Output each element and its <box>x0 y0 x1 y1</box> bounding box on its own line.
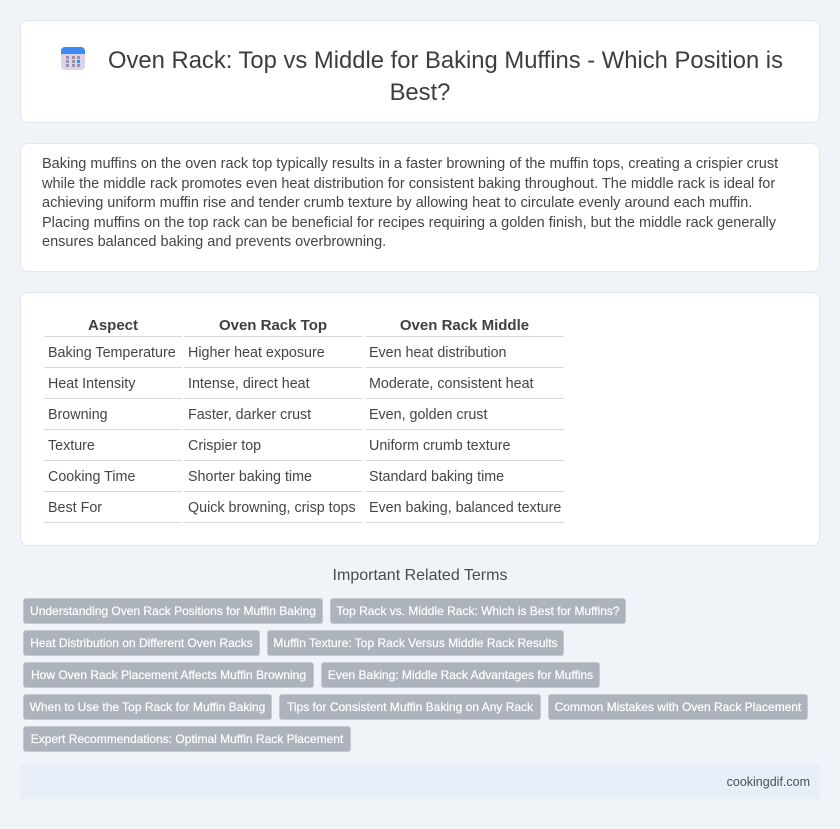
table row: heat intensity: Moderate, consistent heat <box>369 376 534 392</box>
tag <box>279 694 541 720</box>
title <box>108 47 783 106</box>
table row: texture: Crispier top <box>188 438 261 454</box>
table row: baking temperature <box>48 345 506 361</box>
text block: intro: Placing muffins on the top rack can be beneficial for recipes requiring a golden finish, but the middle rack generally <box>42 214 776 230</box>
table row: cooking time <box>48 469 504 485</box>
table row: heat intensity: Heat Intensity <box>48 376 135 392</box>
table row: texture <box>48 438 510 454</box>
tag: Heat Distribution on Different Oven Racks <box>30 636 253 650</box>
table row: best for: Even baking, balanced texture <box>369 500 561 516</box>
table row: heat intensity <box>48 376 534 392</box>
table row: cooking time: Shorter baking time <box>188 469 312 485</box>
table row: best for <box>48 500 561 516</box>
tag: When to Use the Top Rack for Muffin Baking <box>30 700 265 714</box>
table row: baking temperature: Higher heat exposure <box>188 345 325 361</box>
tag: Even Baking: Middle Rack Advantages for Muffins <box>328 668 593 682</box>
tag <box>23 598 323 624</box>
panel: header <box>20 20 820 123</box>
text block: intro: while the middle rack promotes even heat distribution for consistent baking throughout. The middle rack is ideal for <box>42 176 775 192</box>
tag <box>23 630 260 656</box>
text block: intro: ensures balanced baking and prevents overbrowning. <box>42 234 386 250</box>
panel: intro text <box>20 143 820 272</box>
table headers <box>88 317 529 334</box>
table row: cooking time: Cooking Time <box>48 469 135 485</box>
table headers: Aspect <box>88 317 138 334</box>
table row: cooking time: Standard baking time <box>369 469 504 485</box>
tag: Tips for Consistent Muffin Baking on Any Rack <box>287 700 533 714</box>
table headers: Oven Rack Middle <box>400 317 529 334</box>
tags: related terms <box>23 598 808 752</box>
tag: Understanding Oven Rack Positions for Muffin Baking <box>30 604 316 618</box>
footer source: cookingdif.com <box>727 775 810 789</box>
text block: intro: achieving uniform muffin rise and tender crumb texture by allowing heat to circulate evenly around each muffin. <box>42 195 752 211</box>
table headers: Oven Rack Top <box>219 317 327 334</box>
table row: browning: Even, golden crust <box>369 407 487 423</box>
tag <box>23 662 314 688</box>
table row: texture: Texture <box>48 438 95 454</box>
footer <box>20 765 820 799</box>
table row: browning <box>48 407 488 423</box>
tag <box>330 598 626 624</box>
table row: heat intensity: Intense, direct heat <box>188 376 310 392</box>
table row: best for: Best For <box>48 500 102 516</box>
table row: baking temperature: Even heat distribution <box>369 345 506 361</box>
heading: related terms: Important Related Terms <box>333 567 507 584</box>
tag <box>23 726 351 752</box>
tag: How Oven Rack Placement Affects Muffin Browning <box>31 668 306 682</box>
tag <box>23 694 272 720</box>
tag: Muffin Texture: Top Rack Versus Middle Rack Results <box>273 636 558 650</box>
tag: Common Mistakes with Oven Rack Placement <box>555 700 801 714</box>
tag <box>321 662 600 688</box>
table row: browning: Faster, darker crust <box>188 407 311 423</box>
panel: comparison table <box>20 292 820 546</box>
tag <box>548 694 808 720</box>
tag <box>267 630 564 656</box>
title: Oven Rack: Top vs Middle for Baking Muffins - Which Position is <box>108 47 783 74</box>
text block: intro <box>42 156 778 250</box>
table row: best for: Quick browning, crisp tops <box>188 500 356 516</box>
tag: Expert Recommendations: Optimal Muffin Rack Placement <box>31 732 343 746</box>
text block: intro: Baking muffins on the oven rack top typically results in a faster browning of the muffin tops, creating a crispier crust <box>42 156 778 172</box>
table row: baking temperature: Baking Temperature <box>48 345 176 361</box>
title: Best? <box>390 79 450 106</box>
tag: Top Rack vs. Middle Rack: Which is Best for Muffins? <box>336 604 620 618</box>
icon: calendar <box>61 47 85 70</box>
table row: texture: Uniform crumb texture <box>369 438 510 454</box>
table row: browning: Browning <box>48 407 108 423</box>
